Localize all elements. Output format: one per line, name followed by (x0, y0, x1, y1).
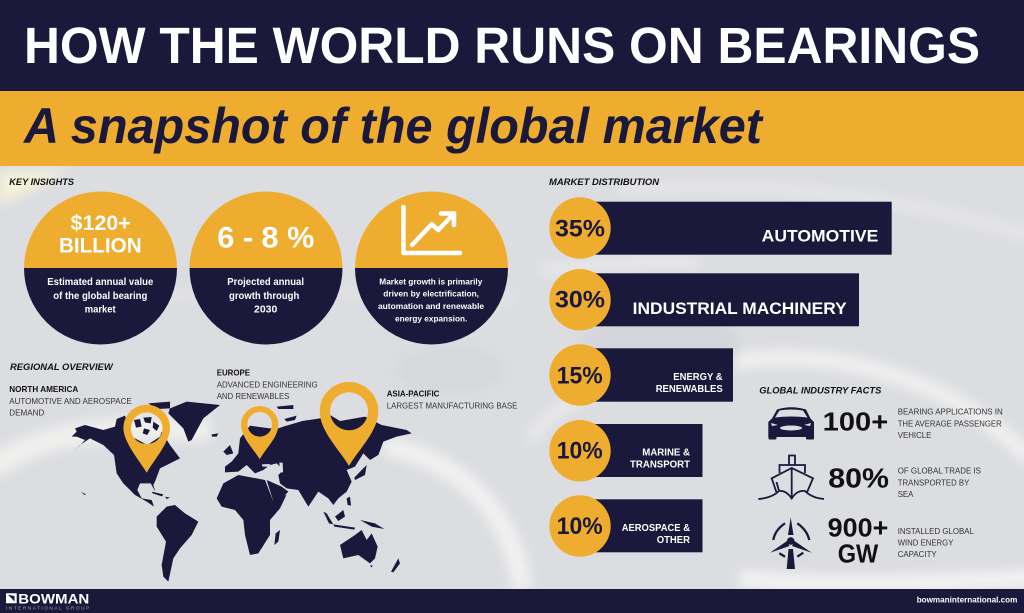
stat circle: market value: market (85, 305, 116, 316)
americas and greenland (72, 402, 220, 582)
title: HOW THE WORLD RUNS ON BEARINGS (24, 17, 980, 74)
fact: 80%: TRANSPORTED BY (898, 477, 970, 487)
fact: 80%: OF GLOBAL TRADE IS (898, 466, 981, 476)
bar: marine and transport 10%: MARINE & (642, 447, 690, 458)
fact: 100+ (768, 406, 1003, 440)
stat circle: growth drivers: Market growth is primarily (379, 276, 483, 286)
text: north america (9, 384, 132, 418)
stat circle: annual growth: growth through (229, 291, 299, 302)
fact: 900+ GW: WIND ENERGY (898, 538, 954, 548)
eurasia, africa and oceania (217, 405, 412, 572)
bar: marine and transport 10%: TRANSPORT (630, 459, 690, 470)
stat circle: growth drivers: energy expansion. (395, 314, 467, 324)
pin: asia-pacific (320, 382, 378, 466)
world map (72, 402, 412, 582)
text: europe: ADVANCED ENGINEERING (217, 379, 318, 389)
title banner (0, 0, 1024, 91)
text: europe: EUROPE (217, 367, 250, 377)
text: europe: AND RENEWABLES (217, 391, 290, 401)
subtitle: A snapshot of the global market (22, 98, 764, 154)
pin: europe (241, 406, 278, 459)
heading: regional overview: REGIONAL OVERVIEW (10, 362, 114, 373)
icon: ship (758, 456, 824, 499)
fact: 900+ GW: CAPACITY (898, 549, 937, 559)
fact: 900+ GW (770, 513, 974, 569)
footer bar (0, 589, 1024, 613)
logo (6, 591, 89, 612)
text: europe (217, 367, 318, 401)
stat circle: market value: Estimated annual value (47, 277, 154, 288)
logo: INTERNATIONAL GROUP (6, 606, 89, 612)
bar: automotive 35%: 35% (555, 216, 605, 243)
stat circle: annual growth (190, 192, 342, 345)
fact: 80% (758, 456, 981, 499)
pin: north america (123, 405, 170, 473)
fact: 100+: THE AVERAGE PASSENGER (898, 418, 1002, 428)
stat circle: market value: BILLION (59, 235, 142, 258)
fact: 80%: 80% (828, 462, 889, 493)
bar: aerospace and other 10%: 10% (557, 513, 603, 540)
bar: automotive 35% (549, 197, 892, 259)
bar: aerospace and other 10% (549, 495, 702, 557)
text: asia-pacific (387, 389, 518, 411)
bar: energy and renewables 15%: 15% (557, 362, 603, 389)
bar: automotive 35%: AUTOMOTIVE (762, 227, 878, 245)
bar: marine and transport 10% (549, 420, 702, 481)
heading: global industry facts: GLOBAL INDUSTRY FACTS (759, 386, 882, 397)
fact: 900+ GW: GW (838, 539, 879, 569)
fact: 100+: BEARING APPLICATIONS IN (898, 406, 1003, 416)
fact: 80%: SEA (898, 489, 914, 499)
stat circle: growth drivers: automation and renewable (378, 301, 484, 311)
bar: industrial machinery 30% (549, 269, 859, 330)
fact: 100+: 100+ (823, 407, 888, 437)
bar: industrial machinery 30%: 30% (555, 287, 605, 314)
stat circle: growth drivers (355, 192, 508, 345)
stat circle: annual growth: 6 - 8 % (217, 222, 314, 255)
text: asia-pacific: ASIA-PACIFIC (387, 389, 439, 399)
icon: wind turbine (770, 517, 812, 569)
stat circle: annual growth: 2030 (254, 305, 278, 316)
fact: 100+: VEHICLE (898, 430, 932, 440)
heading: key insights: KEY INSIGHTS (9, 177, 75, 188)
fact: 900+ GW: INSTALLED GLOBAL (898, 526, 974, 536)
icon: growth chart (404, 207, 460, 253)
bar: energy and renewables 15%: ENERGY & (673, 372, 723, 383)
stat circle: annual growth: Projected annual (227, 277, 304, 288)
heading: market distribution: MARKET DISTRIBUTION (549, 177, 660, 188)
stat circle: growth drivers: driven by electrification, (383, 289, 479, 299)
text: asia-pacific: LARGEST MANUFACTURING BASE (387, 401, 518, 411)
subtitle banner (0, 91, 1024, 166)
text: north america: AUTOMOTIVE AND AEROSPACE (9, 396, 132, 406)
bar: energy and renewables 15% (549, 344, 733, 406)
bar: aerospace and other 10%: OTHER (657, 535, 691, 546)
bar: industrial machinery 30%: INDUSTRIAL MACHINERY (633, 300, 847, 318)
logo: BOWMAN (18, 591, 89, 606)
text: north america: NORTH AMERICA (9, 384, 78, 394)
bar: marine and transport 10%: 10% (557, 438, 603, 465)
icon: car (768, 407, 814, 440)
text: north america: DEMAND (9, 408, 44, 418)
bar: aerospace and other 10%: AEROSPACE & (622, 523, 690, 534)
bar: energy and renewables 15%: RENEWABLES (656, 384, 723, 395)
stat circle: market value: of the global bearing (53, 291, 147, 302)
fact: 900+ GW: 900+ (828, 513, 888, 543)
website: bowmaninternational.com (917, 595, 1018, 605)
stat circle: market value (24, 192, 177, 345)
stat circle: market value: $120+ (71, 212, 131, 235)
